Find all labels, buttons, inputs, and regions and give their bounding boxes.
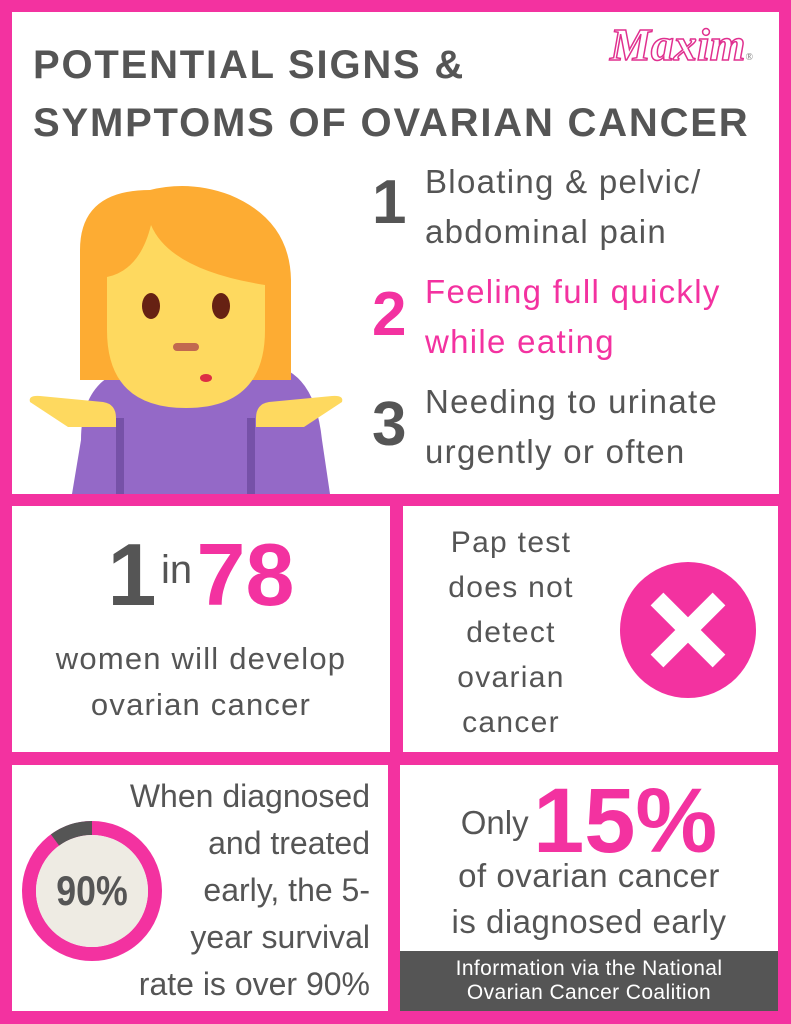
text: year survival	[190, 919, 370, 955]
item 1: 1	[372, 168, 406, 237]
text: women will develop	[56, 641, 346, 676]
stat: only 15%: Only 15%	[461, 770, 717, 872]
item 2: Feeling full quickly	[425, 273, 721, 310]
title	[33, 43, 749, 145]
item 3: 3	[372, 390, 406, 459]
text: of ovarian cancer	[458, 857, 720, 894]
text: detect	[466, 616, 556, 649]
text	[448, 526, 574, 739]
text: early, the 5-	[203, 872, 370, 908]
logo: Maxim: Maxim®	[610, 19, 753, 70]
text	[56, 641, 346, 722]
panel: 1 in 78	[12, 506, 390, 752]
item 1	[372, 163, 702, 250]
chart: donut 90%	[22, 821, 162, 961]
panel: 15%	[400, 765, 778, 1011]
text	[452, 857, 726, 940]
list: symptoms	[372, 163, 721, 470]
text: Pap test	[451, 526, 571, 559]
item 2	[372, 273, 721, 360]
text: is diagnosed early	[452, 903, 726, 940]
panel: top symptoms	[12, 12, 779, 494]
text: rate is over 90%	[139, 966, 370, 1002]
title: POTENTIAL SIGNS &	[33, 43, 465, 87]
item 3: urgently or often	[425, 433, 686, 470]
footer: source: Ovarian Cancer Coalition	[467, 981, 711, 1004]
title: SYMPTOMS OF OVARIAN CANCER	[33, 101, 749, 145]
text: ovarian	[457, 661, 565, 694]
item 3: Needing to urinate	[425, 383, 718, 420]
icon: X circle	[620, 562, 756, 698]
item 2: while eating	[425, 323, 615, 360]
text	[130, 778, 370, 1002]
panel: survival	[12, 765, 388, 1011]
text: cancer	[462, 706, 560, 739]
item 1: abdominal pain	[425, 213, 667, 250]
item 2: 2	[372, 280, 406, 349]
stat: 1 in 78: 1 in 78	[108, 525, 294, 624]
panel: pap test	[403, 506, 778, 752]
chart: donut 90%: 90%	[56, 868, 128, 915]
footer: source: Information via the National	[456, 957, 722, 980]
text: and treated	[208, 825, 370, 861]
text: does not	[448, 571, 574, 604]
text: When diagnosed	[130, 778, 370, 814]
item 1: Bloating & pelvic/	[425, 163, 702, 200]
footer: source	[400, 951, 778, 1011]
icon: shrugging woman	[30, 186, 342, 494]
item 3	[372, 383, 718, 470]
text: ovarian cancer	[91, 687, 311, 722]
